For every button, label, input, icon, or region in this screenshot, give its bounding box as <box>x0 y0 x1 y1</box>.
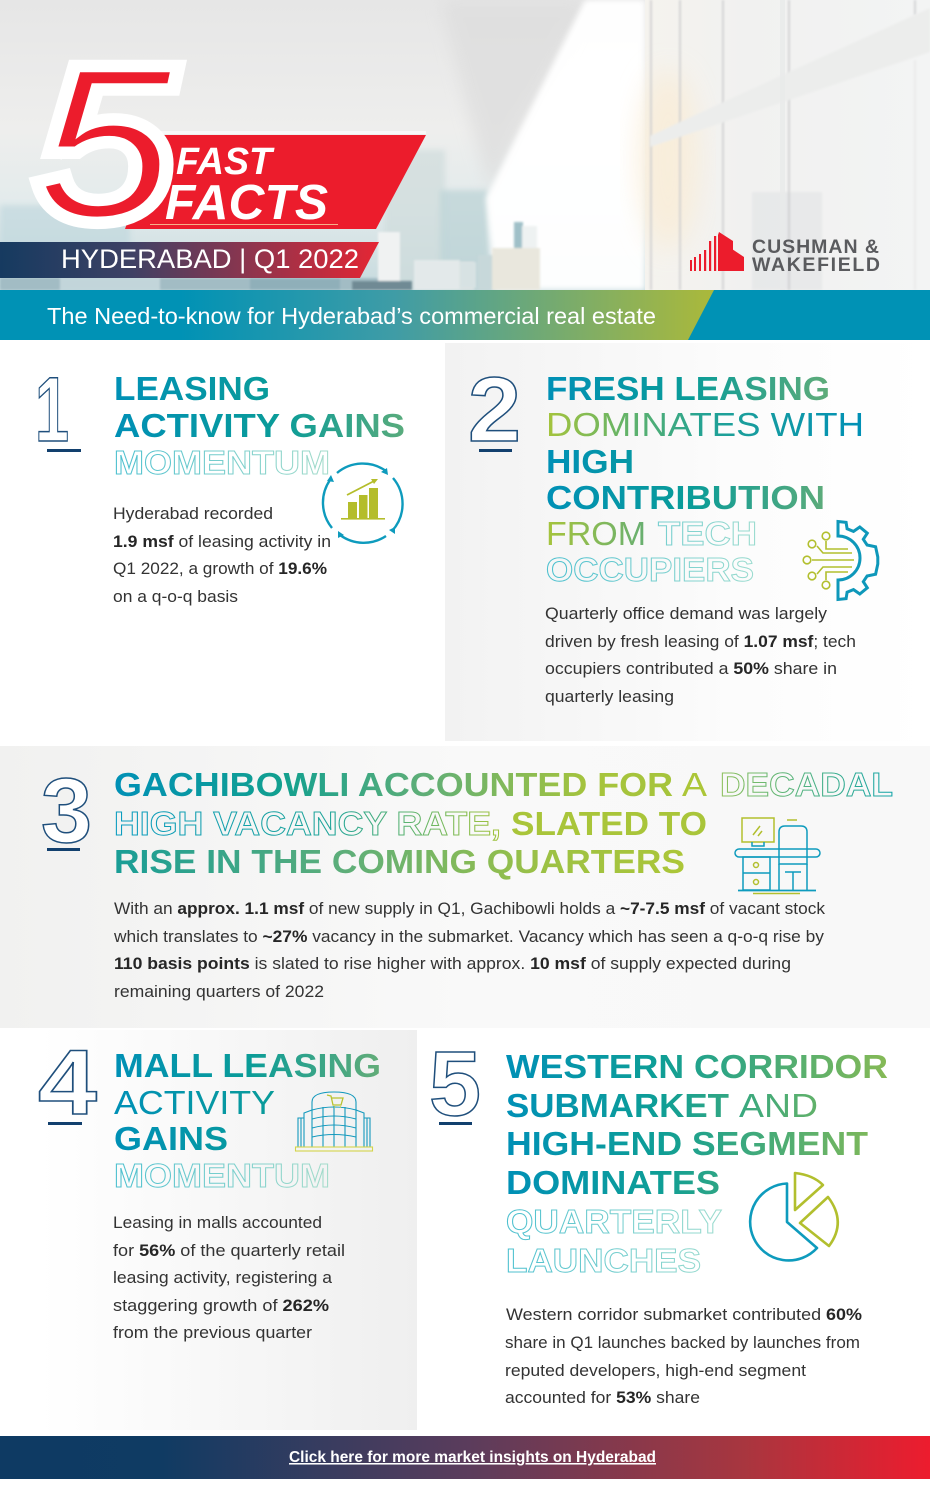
number 4: 4 <box>38 1032 97 1134</box>
number 5: 5 <box>429 1033 481 1135</box>
body 5: accounted for 53% share <box>505 1388 700 1407</box>
heading 2: FROM <box>546 516 646 553</box>
panel 4: mall leasing <box>38 1030 417 1430</box>
body 1: Q1 2022, a growth of 19.6% <box>113 559 327 578</box>
body 3 <box>113 899 825 1001</box>
heading 5: AND <box>739 1088 818 1125</box>
heading 5: QUARTERLY <box>506 1204 722 1241</box>
body 1: Hyderabad recorded <box>113 504 273 523</box>
heading 2: DOMINATES WITH <box>546 407 864 444</box>
logo mark <box>690 232 744 271</box>
subtitle band: Hyderabad Q1 2022 <box>0 242 379 278</box>
body 2: driven by fresh leasing of 1.07 msf; tech <box>545 632 856 651</box>
heading 3: SLATED TO <box>511 806 707 843</box>
heading 1: ACTIVITY GAINS <box>114 408 405 445</box>
facts: FACTS <box>165 176 328 230</box>
panel 3: Gachibowli vacancy <box>0 746 930 1028</box>
heading 5: HIGH-END SEGMENT <box>506 1126 869 1163</box>
body 1: 1.9 msf of leasing activity in <box>113 532 331 551</box>
heading 5: WESTERN CORRIDOR <box>506 1049 888 1086</box>
body 2: quarterly leasing <box>545 687 674 706</box>
warm glow <box>638 70 698 250</box>
heading 5: SUBMARKET <box>506 1088 730 1125</box>
body 3: With an approx. 1.1 msf of new supply in Q1, Gachibowli holds a ~7-7.5 msf of vacant stock <box>114 899 825 918</box>
icon: growth chart in cycle arrows <box>323 464 403 543</box>
heading 4: GAINS <box>114 1121 228 1158</box>
heading 5: DOMINATES <box>506 1165 720 1202</box>
logo: Cushman & Wakefield: CUSHMAN & <box>752 236 879 258</box>
icon: desk and chair <box>735 818 820 894</box>
title: 5 Fast Facts <box>37 23 426 263</box>
heading 3: RISE IN THE COMING QUARTERS <box>114 844 685 881</box>
logo: Cushman & Wakefield: WAKEFIELD <box>752 254 880 276</box>
heading 1 <box>114 371 405 482</box>
body 4: from the previous quarter <box>113 1323 312 1342</box>
number 1: 1 <box>35 359 69 461</box>
body 5: reputed developers, high-end segment <box>505 1361 806 1380</box>
heading 5 <box>506 1049 888 1280</box>
body 3: which translates to ~27% vacancy in the submarket. Vacancy which has seen a q-o-q rise by <box>113 927 824 946</box>
body 2 <box>545 604 856 706</box>
body 2: occupiers contributed a 50% share in <box>545 659 837 678</box>
footer bar <box>0 1436 930 1479</box>
logo: Cushman & Wakefield <box>690 232 880 276</box>
header photo background <box>0 0 930 290</box>
subtitle band: Hyderabad Q1 2022: HYDERABAD | Q1 2022 <box>61 244 359 274</box>
panel 2: fresh leasing <box>445 343 930 741</box>
heading 2 <box>546 371 864 589</box>
heading 2: HIGH <box>546 444 634 481</box>
heading 3: A <box>682 767 708 804</box>
body 4: leasing activity, registering a <box>113 1268 333 1287</box>
heading 4 <box>114 1048 381 1195</box>
heading 3 <box>114 767 893 881</box>
tagline text: The Need-to-know for Hyderabad’s commercial real estate <box>47 303 656 329</box>
heading 1: MOMENTUM <box>114 445 330 482</box>
number 2: 2 <box>468 359 521 461</box>
body 5: share in Q1 launches backed by launches from <box>505 1333 860 1352</box>
number 3: 3 <box>41 760 92 862</box>
heading 4: ACTIVITY <box>114 1085 275 1122</box>
heading 3: DECADAL <box>720 767 893 804</box>
big numeral 5: 5 <box>37 23 174 263</box>
fast: FAST <box>176 141 275 183</box>
body 4 <box>113 1213 345 1342</box>
panel 1: leasing activity <box>35 359 405 606</box>
icon: gear with circuit <box>803 522 878 600</box>
body 1 <box>113 504 331 606</box>
red title banner <box>125 135 426 229</box>
footer link text: Click here for more market insights on Hyderabad <box>289 1449 656 1466</box>
heading 4: MALL LEASING <box>114 1048 381 1085</box>
tagline band <box>0 290 930 340</box>
heading 4: MOMENTUM <box>114 1158 330 1195</box>
icon: pie chart <box>750 1173 838 1260</box>
heading 3: HIGH VACANCY RATE, <box>114 806 501 843</box>
panel 5: western corridor <box>429 1033 888 1407</box>
body 4: staggering growth of 262% <box>113 1296 329 1315</box>
heading 2: TECH <box>658 516 757 553</box>
icon: shopping mall <box>296 1092 372 1151</box>
body 5 <box>505 1305 862 1407</box>
heading 3: GACHIBOWLI ACCOUNTED FOR <box>114 767 673 804</box>
heading 2: CONTRIBUTION <box>546 480 825 517</box>
body 4: for 56% of the quarterly retail <box>113 1241 345 1260</box>
body 1: on a q-o-q basis <box>113 587 238 606</box>
body 2: Quarterly office demand was largely <box>545 604 828 623</box>
heading 2: FRESH LEASING <box>546 371 830 408</box>
big numeral 5: 5 <box>37 23 174 263</box>
body 4: Leasing in malls accounted <box>113 1213 322 1232</box>
heading 2: OCCUPIERS <box>546 552 754 589</box>
heading 1: LEASING <box>114 371 270 408</box>
body 3: remaining quarters of 2022 <box>114 982 324 1001</box>
body 5: Western corridor submarket contributed 60% <box>506 1305 862 1324</box>
heading 5: LAUNCHES <box>506 1243 701 1280</box>
body 3: 110 basis points is slated to rise higher with approx. 10 msf of supply expected during <box>114 954 791 973</box>
